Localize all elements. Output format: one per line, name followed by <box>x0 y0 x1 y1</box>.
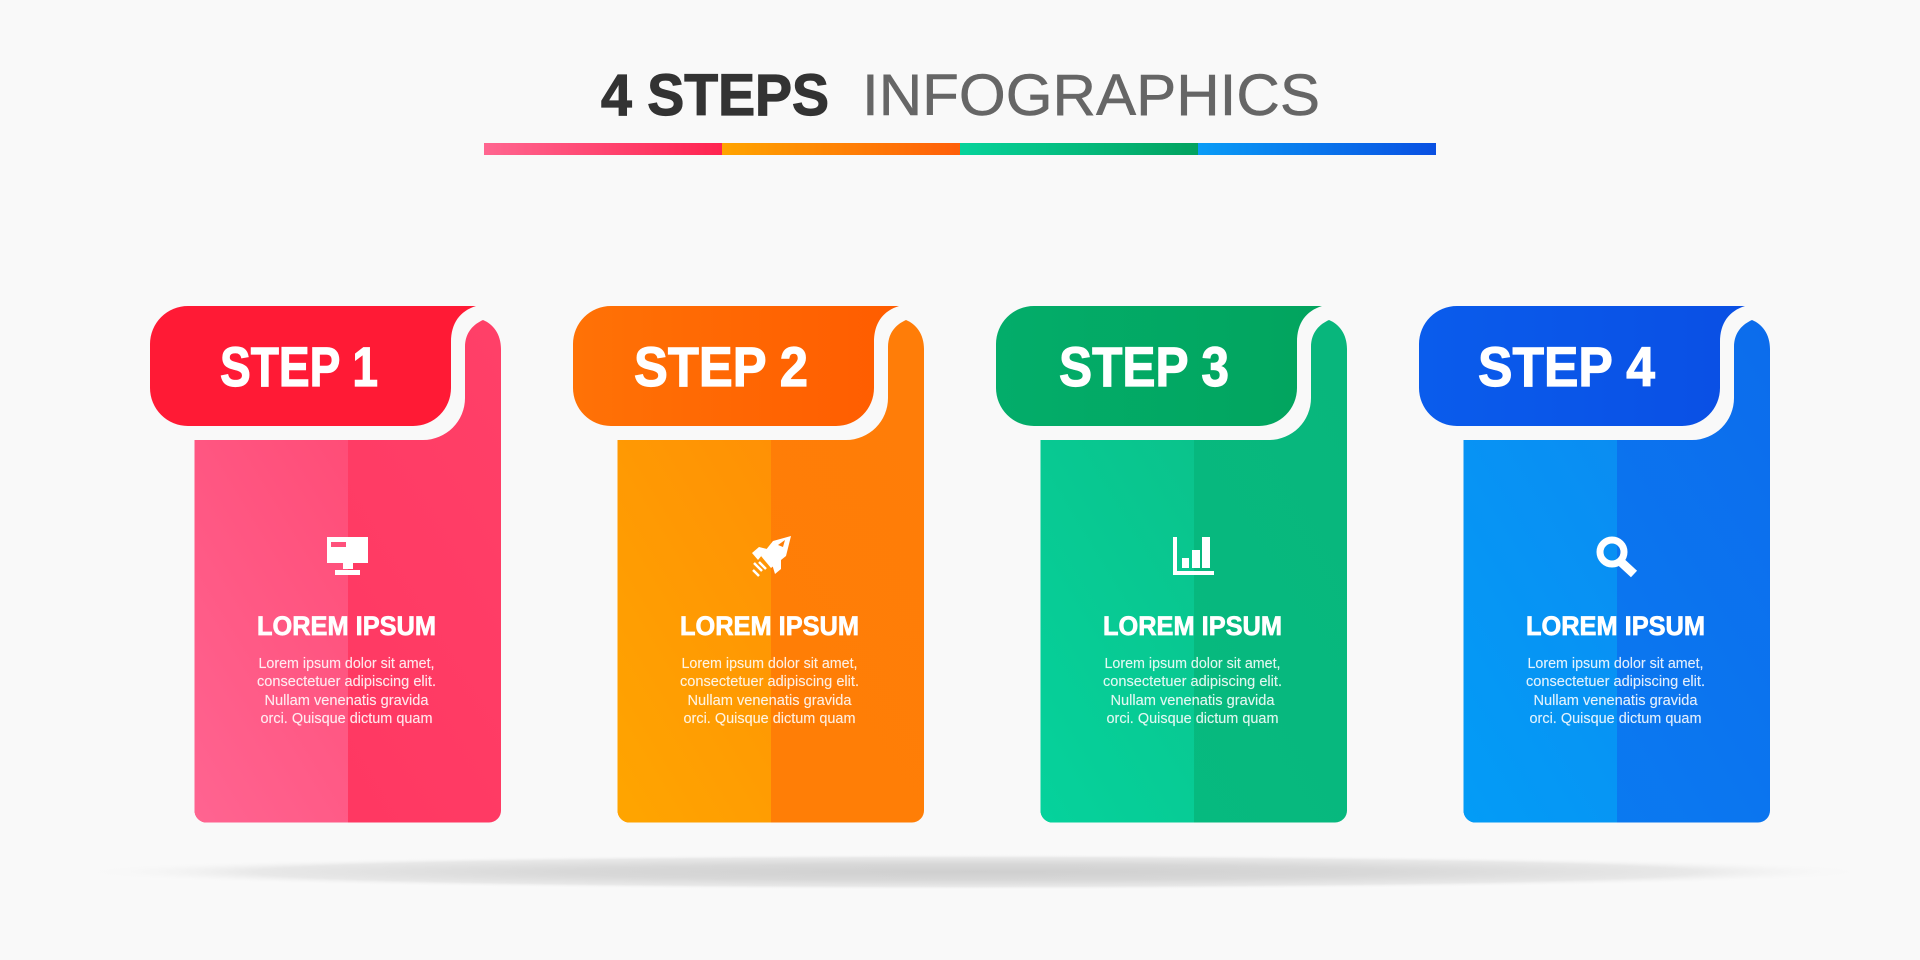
subheading: step 1: LOREM IPSUM <box>257 611 436 641</box>
step tab: step 3 <box>996 306 1322 426</box>
body text: step 2: Nullam venenatis gravida <box>688 693 852 709</box>
body text: step 4: Nullam venenatis gravida <box>1534 693 1698 709</box>
icon: rocket <box>752 536 791 576</box>
body text: step 4 <box>1526 656 1705 727</box>
title <box>601 63 1320 128</box>
card body: step 2 <box>617 320 924 823</box>
title: INFOGRAPHICS <box>862 63 1320 128</box>
body text: step 1: Lorem ipsum dolor sit amet, <box>258 656 434 672</box>
body text: step 2: orci. Quisque dictum quam <box>684 711 856 727</box>
body text: step 1: Nullam venenatis gravida <box>264 693 429 709</box>
panel: step 2 <box>573 306 924 823</box>
subheading: step 2: LOREM IPSUM <box>680 611 859 641</box>
body text: step 1: consectetuer adipiscing elit. <box>257 674 436 690</box>
title underline, four colour segments <box>484 143 1436 155</box>
icon: magnifying glass <box>1600 540 1634 574</box>
body text: step 4: consectetuer adipiscing elit. <box>1526 674 1705 690</box>
panel: step 4 <box>1419 306 1770 823</box>
step tab: step 1 <box>150 306 476 426</box>
panel: step 3 <box>996 306 1347 823</box>
body text: step 3 <box>1103 656 1282 727</box>
tab label: step 2: STEP 2 <box>634 335 808 398</box>
infographic canvas <box>150 73 1770 888</box>
body text: step 4: orci. Quisque dictum quam <box>1530 711 1702 727</box>
subheading: step 4: LOREM IPSUM <box>1526 611 1705 641</box>
card body: step 3 <box>1040 320 1347 823</box>
body text: step 4: Lorem ipsum dolor sit amet, <box>1528 656 1704 672</box>
body text: step 2: Lorem ipsum dolor sit amet, <box>682 656 858 672</box>
title: 4 STEPS <box>601 63 829 128</box>
step tab: step 2 <box>573 306 899 426</box>
body text: step 3: Lorem ipsum dolor sit amet, <box>1104 656 1280 672</box>
card body: step 1 <box>194 320 501 823</box>
body text: step 2 <box>680 656 859 727</box>
body text: step 1: orci. Quisque dictum quam <box>260 711 432 727</box>
step tab: step 4 <box>1419 306 1745 426</box>
body text: step 2: consectetuer adipiscing elit. <box>680 674 859 690</box>
icon: monitor <box>327 537 368 575</box>
panel: step 1 <box>150 306 501 823</box>
subheading: step 3: LOREM IPSUM <box>1103 611 1282 641</box>
body text: step 1 <box>257 656 436 727</box>
icon: bar chart <box>1173 537 1214 575</box>
body text: step 3: orci. Quisque dictum quam <box>1106 711 1278 727</box>
tab label: step 1: STEP 1 <box>220 335 378 398</box>
floor shadow <box>75 854 1875 890</box>
body text: step 3: Nullam venenatis gravida <box>1110 693 1275 709</box>
card body: step 4 <box>1463 320 1770 823</box>
tab label: step 4: STEP 4 <box>1478 335 1655 398</box>
tab label: step 3: STEP 3 <box>1059 335 1229 398</box>
body text: step 3: consectetuer adipiscing elit. <box>1103 674 1282 690</box>
